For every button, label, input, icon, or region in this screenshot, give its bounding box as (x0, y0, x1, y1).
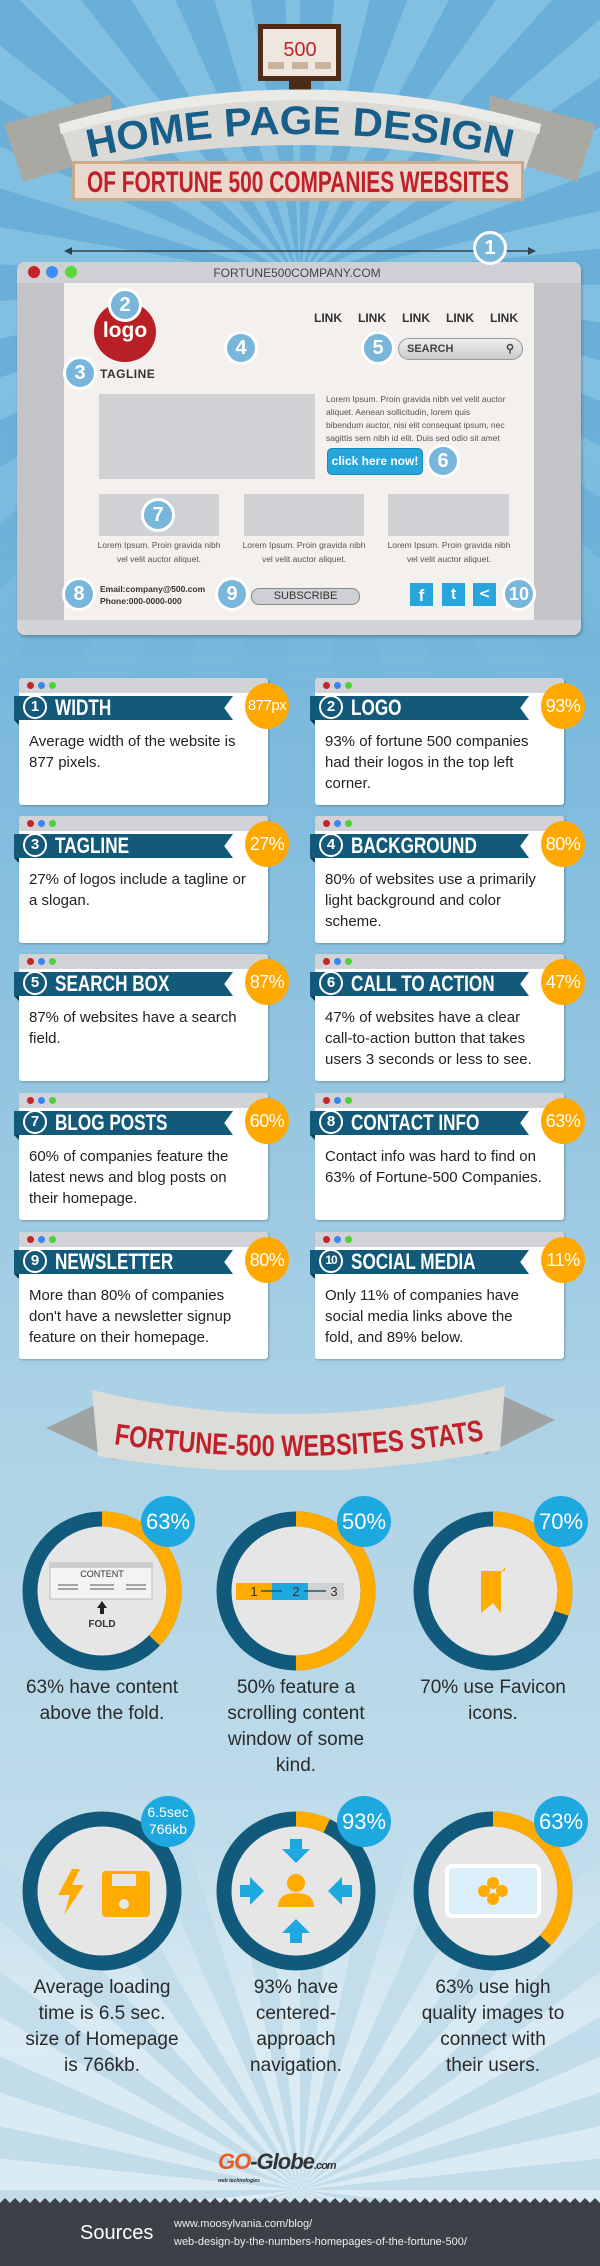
card 10: social media: SOCIAL MEDIA (351, 1249, 476, 1274)
text: 9 (226, 583, 238, 605)
stat 2: scrolling window (216, 1496, 391, 1776)
stat 1: content above fold: 63% (146, 1509, 190, 1534)
blog boxes: Lorem Ipsum. Proin gravida nibh vel velit auctor aliquet. (243, 540, 365, 564)
contact text (100, 584, 205, 606)
stat 1: content above fold: above the fold. (40, 1703, 164, 1724)
contact text: Email:company@500.com (100, 584, 205, 594)
card 6: call to action: 47% of websites have a clear (325, 1009, 520, 1026)
text: is 766kb. (64, 2055, 140, 2076)
logo: logo (103, 319, 147, 342)
background rays bottom (0, 1906, 600, 2202)
cta button (327, 448, 423, 475)
subscribe: SUBSCRIBE (274, 590, 337, 602)
nav links: LINK (446, 311, 474, 325)
card 1: width: 877px (248, 697, 286, 714)
text: 4 (235, 337, 247, 359)
subscribe (251, 588, 360, 605)
blog boxes (98, 494, 510, 564)
background rays top (0, 0, 600, 522)
card 7: blog posts: 7 (31, 1113, 39, 1130)
text: 2 (119, 294, 131, 316)
card 5: search box: field. (29, 1030, 61, 1047)
stat 6: high quality images: 63% (539, 1809, 583, 1834)
card 3: tagline (19, 816, 268, 943)
numbered markers (473, 231, 507, 265)
card 4: background: BACKGROUND (351, 833, 477, 858)
card 7: blog posts: 60% of companies feature the (29, 1148, 228, 1165)
card 9: newsletter: 9 (31, 1252, 39, 1269)
stat 1: content above fold (22, 1496, 195, 1724)
text: web technologies (218, 2178, 260, 2184)
card 4: background: 80% (546, 834, 580, 854)
hero image (99, 394, 315, 479)
footer: sources (0, 2198, 600, 2266)
footer: sources: web-design-by-the-numbers-homepages-of-the-fortune-500/ (174, 2236, 467, 2248)
icon: monitor 500: 500 (283, 39, 317, 61)
text: 7 (152, 504, 164, 526)
stat 2: scrolling window: 2 (292, 1584, 300, 1599)
card 6: call to action: users 3 seconds or less to see. (325, 1051, 532, 1068)
card 10: social media: fold, and 89% below. (325, 1329, 463, 1346)
card 4: background: 4 (327, 836, 335, 853)
hero text (326, 394, 506, 443)
card 2: logo: 2 (327, 698, 335, 715)
card 7: blog posts (19, 1093, 268, 1220)
footer: sources: www.moosylvania.com/blog/ (174, 2218, 312, 2230)
nav links: LINK (358, 311, 386, 325)
stat 2: scrolling window: scrolling content (227, 1703, 365, 1724)
card 6: call to action: 47% (546, 972, 580, 992)
nav links: LINK (402, 311, 430, 325)
card 8: contact info: 63% (546, 1111, 580, 1131)
card 5: search box: 87% of websites have a search (29, 1009, 237, 1026)
stat 5: centered navigation: 93% (342, 1809, 386, 1834)
numbered markers: 1 (484, 237, 496, 259)
stat 3: favicon (414, 1496, 588, 1724)
text: 8 (73, 583, 85, 605)
cta button: click here now! (332, 454, 418, 468)
stat 5: centered navigation: centered- (256, 2003, 336, 2024)
card 8: contact info: Contact info was hard to find on (325, 1148, 536, 1165)
text: 10 (509, 584, 529, 604)
card 8: contact info: CONTACT INFO (351, 1110, 479, 1135)
search box (398, 338, 523, 360)
card 7: blog posts: latest news and blog posts on (29, 1169, 227, 1186)
card 6: call to action: CALL TO ACTION (351, 971, 495, 996)
logo: go-globe: GO-Globe.com (218, 2149, 336, 2174)
tagline: TAGLINE (100, 367, 155, 381)
hero text: sagittis sem nibh id elit. Duis sed odio sit amet (326, 433, 500, 443)
card 5: search box: 5 (31, 974, 39, 991)
card 4: background: 80% of websites use a primarily (325, 871, 536, 888)
stat 4: loading time: time is 6.5 sec. (39, 2003, 165, 2024)
card 10: social media: Only 11% of companies have (325, 1287, 519, 1304)
card 9: newsletter: feature on their homepage. (29, 1329, 209, 1346)
card 7: blog posts: their homepage. (29, 1190, 137, 1207)
card 9: newsletter: don't have a newsletter signup (29, 1308, 231, 1325)
stat 2: scrolling window: 50% feature a (237, 1677, 355, 1698)
stat 4: loading time: 6.5sec (147, 1804, 189, 1820)
card 3: tagline: 3 (31, 836, 39, 853)
card 3: tagline: 27% (250, 834, 284, 854)
card 3: tagline: 27% of logos include a tagline or (29, 871, 246, 888)
stat 1: content above fold: FOLD (88, 1619, 116, 1630)
card 9: newsletter: More than 80% of companies (29, 1287, 224, 1304)
card 4: background: light background and color (325, 892, 501, 909)
stat 6: high quality images: 63% use high (435, 1977, 551, 1998)
card 2: logo: 93% (546, 696, 580, 716)
stat 6: high quality images (414, 1796, 588, 2076)
stat 1: content above fold: 63% have content (26, 1677, 178, 1698)
text: approach (256, 2029, 336, 2050)
text: navigation. (250, 2055, 342, 2076)
stats ribbon: FORTUNE-500 WEBSITES STATS (115, 1420, 483, 1456)
nav links (314, 311, 518, 325)
stat 3: favicon: 70% use Favicon (420, 1677, 566, 1698)
search box: ⚲ (506, 343, 514, 355)
card 9: newsletter (19, 1232, 268, 1359)
card 9: newsletter: NEWSLETTER (55, 1249, 173, 1274)
card 4: background: scheme. (325, 913, 382, 930)
card 10: social media: social media links above the (325, 1308, 513, 1325)
footer: sources: Sources (80, 2222, 153, 2244)
card 1: width: 877 pixels. (29, 754, 101, 771)
stat 6: high quality images: quality images to (422, 2003, 564, 2024)
card 4: background (315, 816, 564, 943)
stat 5: centered navigation (216, 1796, 391, 2076)
text: window of some (228, 1729, 364, 1750)
social icons: t (451, 586, 456, 603)
card 7: blog posts: 60% (250, 1111, 284, 1131)
card 2: logo (315, 678, 564, 805)
card 10: social media: 11% (546, 1250, 580, 1270)
card 8: contact info (315, 1093, 564, 1220)
text: their users. (446, 2055, 540, 2076)
blog boxes: Lorem Ipsum. Proin gravida nibh vel velit auctor aliquet. (98, 540, 220, 564)
stat 2: scrolling window: 50% (342, 1509, 386, 1534)
search box: SEARCH (407, 343, 453, 355)
card 2: logo: 93% of fortune 500 companies (325, 733, 528, 750)
card 1: width: Average width of the website is (29, 733, 236, 750)
stat 1: content above fold: CONTENT (80, 1569, 124, 1579)
text: 3 (74, 362, 86, 384)
card 1: width (19, 678, 268, 805)
text: kind. (276, 1755, 316, 1776)
url: FORTUNE500COMPANY.COM (213, 266, 381, 280)
text: size of Homepage (25, 2029, 179, 2050)
stat 4: loading time: Average loading (34, 1977, 170, 1998)
social icons: < (479, 586, 490, 602)
card 3: tagline: a slogan. (29, 892, 90, 909)
card 10: social media: 10 (325, 1253, 337, 1267)
card 8: contact info: 8 (327, 1113, 335, 1130)
card 2: logo: corner. (325, 775, 371, 792)
card 5: search box (19, 954, 268, 1081)
width arrow (64, 247, 536, 255)
social icons (410, 583, 496, 606)
card 2: logo: LOGO (351, 695, 402, 720)
nav links: LINK (490, 311, 518, 325)
browser mockup (17, 262, 581, 635)
card 3: tagline: TAGLINE (55, 833, 129, 858)
card 9: newsletter: 80% (250, 1250, 284, 1270)
hero text: bibendum auctor, nisi elit consequat ipsum, nec (326, 420, 505, 430)
card 5: search box: SEARCH BOX (55, 971, 169, 996)
card 6: call to action (315, 954, 564, 1081)
text: connect with (440, 2029, 546, 2050)
logo (94, 302, 156, 362)
stat 3: favicon: icons. (468, 1703, 518, 1724)
stat 5: centered navigation: 93% have (254, 1977, 338, 1998)
social icons: f (419, 586, 424, 605)
stat 4: loading time (22, 1796, 195, 2076)
card 7: blog posts: BLOG POSTS (55, 1110, 168, 1135)
card 1: width: WIDTH (55, 695, 111, 720)
nav links: LINK (314, 311, 342, 325)
card 8: contact info: 63% of Fortune-500 Companies. (325, 1169, 542, 1186)
stats ribbon (46, 1386, 555, 1470)
stat 4: loading time: 766kb (149, 1821, 187, 1837)
stat 2: scrolling window: 3 (330, 1584, 338, 1599)
contact text: Phone:000-0000-000 (100, 596, 182, 606)
hero text: Lorem Ipsum. Proin gravida nibh vel velit auctor (326, 394, 506, 404)
title: home page design: HOME PAGE DESIGN (86, 106, 514, 157)
card 5: search box: 87% (250, 972, 284, 992)
blog boxes: Lorem Ipsum. Proin gravida nibh vel velit auctor aliquet. (388, 540, 510, 564)
ribbon banner (4, 90, 596, 182)
header (4, 24, 596, 201)
text: 6 (437, 450, 449, 472)
icon: monitor 500 (258, 24, 341, 93)
hero text: aliquet. Aenean sollicitudin, lorem quis (326, 407, 470, 417)
card 2: logo: had their logos in the top left (325, 754, 513, 771)
card 6: call to action: 6 (327, 974, 335, 991)
stat 3: favicon: 70% (539, 1509, 583, 1534)
stat 2: scrolling window: 1 (250, 1584, 258, 1599)
card 6: call to action: call-to-action button that takes (325, 1030, 525, 1047)
card 10: social media (315, 1232, 564, 1359)
text: 5 (372, 337, 384, 359)
card 1: width: 1 (31, 698, 39, 715)
